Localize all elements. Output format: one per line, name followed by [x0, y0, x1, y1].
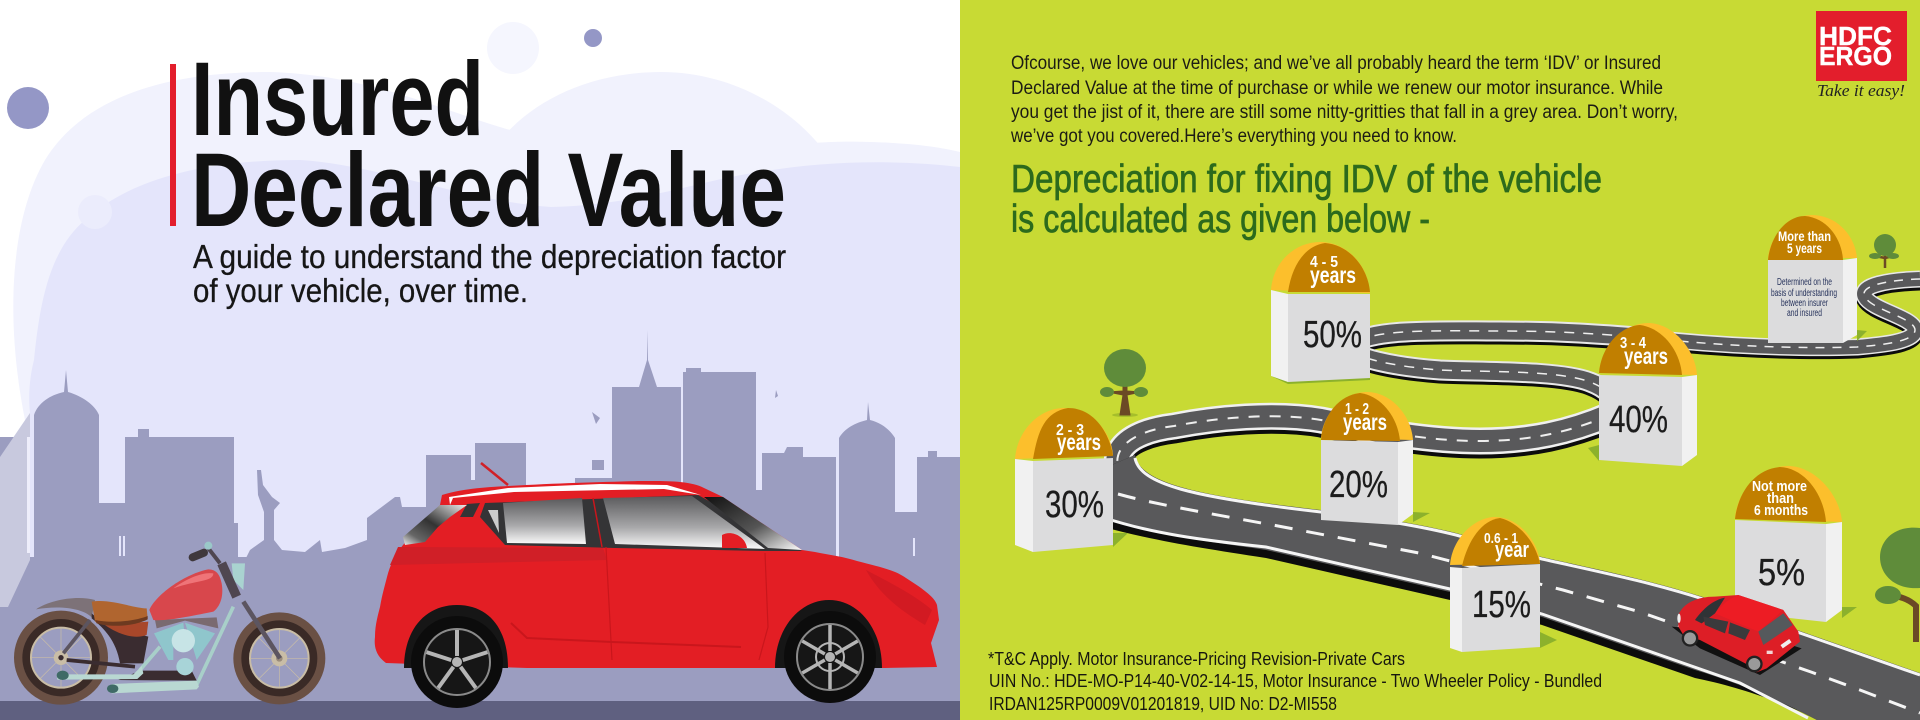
milestone: 0.6-1 year: 0.6 - 1: [1484, 530, 1518, 547]
front wheel: [784, 611, 876, 703]
winding road: [1100, 279, 1920, 720]
car body: [1678, 595, 1800, 672]
front wheel: [238, 617, 321, 700]
windows: [503, 498, 586, 544]
subtitle: A guide to understand the depreciation factor: [193, 238, 786, 275]
tree: right edge: [1875, 528, 1920, 642]
fender: [36, 598, 95, 617]
footer disclaimer: UIN No.: HDE-MO-P14-40-V02-14-15, Motor Insurance - Two Wheeler Policy - Bundled: [989, 671, 1602, 691]
footer disclaimer: *T&C Apply. Motor Insurance-Pricing Revision-Private Cars: [988, 649, 1405, 669]
window frames: [480, 495, 802, 551]
milestone: 3-4 years: 3 - 4: [1620, 335, 1646, 352]
milestone: not more than 6 months: 5%: [1758, 552, 1805, 594]
milestone: more than 5 years: [1768, 215, 1867, 343]
milestone: 0.6-1 year: 15%: [1472, 584, 1531, 626]
car wheels: [1682, 630, 1698, 647]
title: Insured: [191, 41, 484, 158]
milestone: 3-4 years: 40%: [1609, 399, 1668, 441]
milestone: 4-5 years: years: [1310, 262, 1356, 288]
milestone: more than 5 years: More than: [1778, 228, 1831, 244]
subtitle: [193, 238, 786, 309]
seat: [105, 622, 148, 637]
milestone: 3-4 years: years: [1624, 343, 1668, 369]
road: far segment: [1650, 279, 1920, 351]
logo: HDFC ERGO: HDFC: [1819, 21, 1892, 51]
heading: is calculated as given below -: [1011, 198, 1430, 241]
milestone: not more than 6 months: than: [1767, 490, 1794, 507]
milestone: more than 5 years: between insurer: [1781, 298, 1828, 309]
milestone: 2-3 years: [1015, 408, 1128, 552]
subtitle: of your vehicle, over time.: [193, 272, 528, 309]
milestone: more than 5 years: Determined on the: [1777, 277, 1832, 288]
frame: [92, 613, 148, 663]
intro paragraph: you get the jist of it, there are still some nitty-gritties that fall in a grey area. Don’t worry,: [1011, 102, 1678, 123]
road: middle run: [1117, 415, 1610, 484]
tree: top right: [1869, 234, 1899, 268]
title: [191, 41, 786, 249]
illustration: red car: [375, 463, 939, 708]
milestone: 2-3 years: 30%: [1045, 484, 1104, 526]
handlebar: [193, 553, 204, 557]
milestone: 0.6-1 year: year: [1495, 537, 1529, 562]
milestone: more than 5 years: basis of understanding: [1771, 288, 1837, 299]
milestone: 1-2 years: [1321, 392, 1430, 525]
car body: [375, 481, 939, 668]
logo: HDFC ERGO: ERGO: [1819, 41, 1892, 71]
rear wheel: [18, 615, 104, 700]
car shadow: [1672, 627, 1802, 675]
milestone: 3-4 years: [1588, 323, 1697, 466]
logo: HDFC ERGO: [1816, 11, 1907, 100]
city skyline: [0, 330, 960, 702]
panel: right background: [960, 0, 1920, 720]
accent bar: [170, 64, 176, 226]
rear wheel: [411, 616, 503, 708]
milestone: 1-2 years: 20%: [1329, 464, 1388, 506]
milestone: 4-5 years: 4 - 5: [1310, 254, 1338, 271]
windows: [1695, 598, 1725, 623]
wheel arches: [404, 600, 882, 668]
intro paragraph: Declared Value at the time of purchase or while we renew our motor insurance. While: [1011, 78, 1663, 99]
road strip: [0, 701, 960, 720]
milestone: 2-3 years: years: [1057, 429, 1101, 455]
pipes: [57, 666, 143, 680]
intro paragraph: Ofcourse, we love our vehicles; and we’ve all probably heard the term ‘IDV’ or Insured: [1011, 53, 1661, 74]
milestone: more than 5 years: 5 years: [1787, 240, 1822, 256]
milestone: more than 5 years: and insured: [1787, 308, 1822, 319]
road: upper loop: [1351, 331, 1650, 431]
panel: left background: [0, 0, 960, 720]
milestone: 4-5 years: 50%: [1303, 314, 1362, 356]
tank: [149, 569, 222, 620]
tree: left: [1100, 349, 1148, 417]
illustration: motorcycle: [18, 542, 321, 700]
road: near section: [1100, 455, 1920, 720]
fork: [232, 563, 245, 590]
heading: [1011, 158, 1602, 241]
milestone: 2-3 years: 2 - 3: [1056, 422, 1084, 439]
milestone: 1-2 years: 1 - 2: [1345, 401, 1369, 418]
engine: [155, 617, 218, 628]
footer disclaimer: [988, 649, 1602, 714]
intro paragraph: we’ve got you covered.Here’s everything you need to know.: [1010, 126, 1457, 147]
milestone: 4-5 years: [1271, 242, 1370, 384]
milestone: 1-2 years: years: [1343, 409, 1387, 435]
title: Declared Value: [191, 132, 786, 249]
heading: Depreciation for fixing IDV of the vehicle: [1011, 158, 1602, 201]
milestone: not more than 6 months: 6 months: [1754, 502, 1808, 519]
milestone: 0.6-1 year: [1450, 517, 1557, 652]
small red car on road: [1672, 595, 1802, 675]
roof stripe: [449, 484, 701, 505]
milestone: not more than 6 months: [1735, 466, 1857, 622]
milestone: not more than 6 months: Not more: [1752, 478, 1807, 495]
footer disclaimer: IRDAN125RP0009V01201819, UID No: D2-MI558: [989, 694, 1337, 714]
intro paragraph: [1010, 53, 1678, 147]
logo: HDFC ERGO: Take it easy!: [1817, 81, 1905, 100]
